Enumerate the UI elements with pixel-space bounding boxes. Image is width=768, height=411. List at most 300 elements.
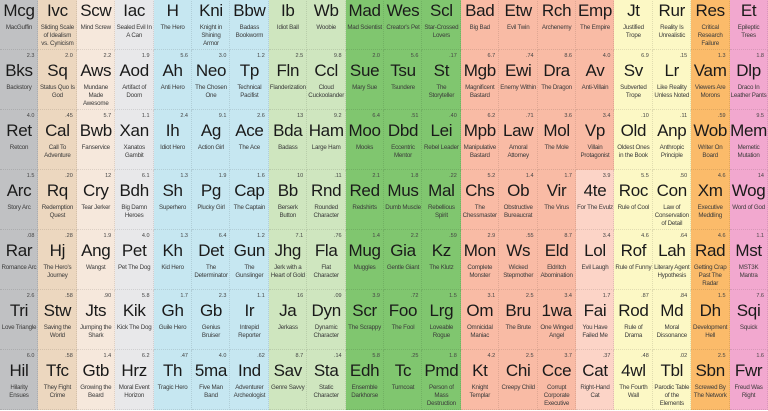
periodic table grid: Dh [700, 301, 721, 320]
periodic table grid: 2.1 [372, 173, 380, 179]
periodic table grid: Hrz [121, 361, 147, 380]
periodic table grid: Lah [658, 241, 686, 260]
periodic table grid: Complete Monster [467, 264, 492, 279]
periodic table grid: Edh [350, 361, 379, 380]
periodic table grid: Wog [732, 181, 765, 200]
periodic table grid: 1.7 [180, 293, 188, 299]
periodic table grid: Superhero [159, 204, 186, 211]
periodic table grid: Viewers Are Morons [695, 84, 726, 99]
periodic table grid: 4.6 [718, 233, 726, 239]
periodic table grid: Rch [542, 1, 571, 20]
periodic table grid: 6.9 [641, 53, 649, 59]
periodic table grid: Mgb [464, 61, 496, 80]
periodic table grid: The Virus [544, 204, 569, 211]
periodic table grid: Wes [387, 1, 419, 20]
periodic table grid: 1.1 [756, 233, 764, 239]
periodic table grid: 3.4 [564, 293, 572, 299]
periodic table grid: Rur [659, 1, 685, 20]
periodic table grid: Tear Jerker [81, 204, 110, 211]
periodic table grid: Sav [274, 361, 302, 380]
periodic table grid: Justified Trope [623, 24, 644, 39]
periodic table grid: Anthropic Principle [660, 144, 684, 159]
periodic table grid: Rounded Character [314, 204, 339, 219]
periodic table grid: .37 [603, 353, 610, 359]
periodic table grid: Gh [162, 301, 184, 320]
periodic table grid: .59 [718, 113, 726, 119]
periodic table grid: 4.6 [718, 173, 726, 179]
periodic table grid: .10 [641, 113, 649, 119]
periodic table grid: Call To Adventure [44, 144, 71, 159]
periodic table grid: Sliding Scale of Idealism vs. Cynicism [41, 24, 74, 47]
periodic table grid: One Winged Angel [540, 324, 573, 339]
periodic table grid: Evil Twin [507, 24, 529, 31]
periodic table grid: Cry [83, 181, 109, 200]
periodic table grid: Pet [122, 241, 146, 260]
periodic table grid: Muggles [354, 264, 376, 271]
periodic table grid: Kz [432, 241, 451, 260]
periodic table grid: Plucky Girl [197, 204, 225, 211]
periodic table grid: 1.3 [180, 233, 188, 239]
periodic table grid: The Determinator [194, 264, 228, 279]
periodic table grid: 13 [297, 113, 303, 119]
periodic table grid: 3.9 [603, 173, 610, 179]
periodic table grid: Saving the World [44, 324, 71, 339]
periodic table grid: Bad [465, 1, 494, 20]
periodic table grid: 1wa [541, 301, 572, 320]
periodic table grid: 3.6 [564, 113, 572, 119]
periodic table grid: Rule of Funny [615, 264, 651, 271]
periodic table grid: H [167, 1, 179, 20]
periodic table grid: Tsu [390, 61, 416, 80]
periodic table grid: 1.7 [564, 173, 572, 179]
periodic table grid: Idiot Hero [160, 144, 185, 151]
periodic table grid: Mol [543, 121, 570, 140]
periodic table grid: 2.4 [180, 113, 188, 119]
periodic table grid: Manipulative Bastard [464, 144, 496, 159]
periodic table grid: .64 [680, 233, 687, 239]
periodic table grid: Creator's Pet [386, 24, 420, 31]
periodic table grid: Sealed Evil In A Can [117, 24, 152, 39]
periodic table grid: The Empire [580, 24, 610, 31]
periodic table grid: 4.0 [603, 53, 610, 59]
row 7: 6.0 [27, 353, 34, 359]
periodic table grid: .15 [680, 53, 687, 59]
periodic table grid: Sta [314, 361, 338, 380]
row 2: 2.3 [27, 53, 34, 59]
periodic table grid: Anti Hero [161, 84, 185, 91]
periodic table grid: Five Man Band [199, 384, 223, 399]
periodic table grid: For The Evulz [577, 204, 613, 211]
periodic table grid: 1.7 [603, 293, 610, 299]
periodic table grid: The Chosen One [195, 84, 227, 99]
periodic table grid: Tsundere [391, 84, 415, 91]
periodic table grid: 6.2 [142, 353, 150, 359]
periodic table grid: Dumb Muscle [385, 204, 421, 211]
periodic table grid: Th [163, 361, 182, 380]
periodic table grid: Writer On Board [698, 144, 722, 159]
periodic table grid: Growing the Beard [80, 384, 111, 399]
periodic table grid: Xm [698, 181, 723, 200]
periodic table grid: 6.4 [372, 113, 380, 119]
periodic table grid: 2.6 [257, 113, 265, 119]
periodic table grid: 7.6 [756, 293, 764, 299]
periodic table grid: Kni [199, 1, 223, 20]
periodic table grid: Genius Bruiser [202, 324, 220, 339]
periodic table grid: 1.5 [449, 293, 457, 299]
periodic table grid: Tbl [660, 361, 683, 380]
periodic table grid: .87 [641, 293, 649, 299]
periodic table grid: 4wl [621, 361, 646, 380]
periodic table grid: Screwed By The Network [694, 384, 727, 399]
periodic table grid: Scl [430, 1, 453, 20]
periodic table grid: Ivc [47, 1, 68, 20]
periodic table grid: 3.1 [488, 293, 495, 299]
periodic table grid: .11 [334, 173, 342, 179]
periodic table grid: Sq [47, 61, 67, 80]
periodic table grid: Getting Crap Past The Radar [694, 264, 727, 287]
periodic table grid: 1.5 [718, 293, 726, 299]
periodic table grid: Woobie [316, 24, 336, 31]
periodic table grid: .90 [104, 293, 111, 299]
periodic table grid: 5.7 [104, 113, 111, 119]
periodic table grid: Av [586, 61, 604, 80]
periodic table grid: Mpb [464, 121, 496, 140]
periodic table grid: Rebel Leader [424, 144, 459, 151]
periodic table grid: Right-Hand Cat [580, 384, 610, 399]
periodic table grid: Freud Was Right [734, 384, 763, 399]
periodic table grid: Md [660, 301, 683, 320]
periodic table grid: You Have Failed Me [582, 324, 608, 339]
row 7 [0, 350, 38, 410]
periodic table grid: Badass Bookworm [236, 24, 263, 39]
periodic table grid: Reality Is Unrealistic [658, 24, 685, 39]
periodic table grid: 1.4 [104, 353, 111, 359]
periodic table grid: Wb [314, 1, 339, 20]
periodic table grid: Big Damn Heroes [121, 204, 147, 219]
periodic table grid: Magnificent Bastard [465, 84, 495, 99]
periodic table grid: Subverted Trope [620, 84, 647, 99]
periodic table grid: 1.2 [257, 233, 265, 239]
row 5 [0, 230, 38, 290]
periodic table grid: 5.6 [180, 53, 188, 59]
periodic table grid: Jt [627, 1, 640, 20]
periodic table grid: Mooks [356, 144, 373, 151]
periodic table grid: Creepy Child [502, 384, 535, 391]
periodic table grid: 2.9 [488, 233, 495, 239]
periodic table grid: Action Girl [198, 144, 224, 151]
periodic table grid: Bb [278, 181, 298, 200]
periodic table grid: Kid Hero [161, 264, 184, 271]
periodic table grid: Anp [657, 121, 686, 140]
periodic table grid: 1.6 [756, 353, 764, 359]
periodic table grid: Artifact of Doom [122, 84, 146, 99]
periodic table grid: Ah [162, 61, 183, 80]
periodic table grid: Ccl [314, 61, 338, 80]
row 4: Story Arc [7, 204, 31, 211]
periodic table grid: Jts [85, 301, 106, 320]
periodic table grid: Chs [465, 181, 494, 200]
periodic table grid: Mary Sue [352, 84, 377, 91]
periodic table grid: Flanderization [270, 84, 306, 91]
periodic table grid: Kt [472, 361, 488, 380]
periodic table grid: 1.1 [142, 113, 150, 119]
periodic table grid: Mug [348, 241, 381, 260]
periodic table grid: Et [741, 1, 756, 20]
periodic table grid: Genre Savvy [271, 384, 305, 391]
periodic table grid: Obstructive Bureaucrat [504, 204, 533, 219]
row 2: Backstory [6, 84, 32, 91]
periodic table grid: 5.8 [142, 293, 150, 299]
row 2: Bks [5, 61, 33, 80]
periodic table grid: Tc [395, 361, 411, 380]
periodic table grid: Cloud Cuckoolander [308, 84, 344, 99]
periodic table grid: The Fool [392, 324, 414, 331]
periodic table grid: Fla [315, 241, 338, 260]
periodic table grid: The Storyteller [429, 84, 454, 99]
periodic table grid: 4.6 [641, 233, 649, 239]
periodic table grid: Bdh [120, 181, 149, 200]
periodic table grid: Ham [309, 121, 344, 140]
periodic table grid: Ih [166, 121, 179, 140]
periodic table grid: Rnd [311, 181, 341, 200]
periodic table grid: Tp [240, 61, 259, 80]
row 3: Ret [6, 121, 32, 140]
periodic table grid: Etw [504, 1, 532, 20]
periodic table grid: Law [503, 121, 533, 140]
periodic table grid: Bda [273, 121, 302, 140]
periodic table grid: Rof [621, 241, 646, 260]
periodic table grid: 5.2 [488, 173, 495, 179]
row 1 [0, 0, 38, 50]
periodic table grid: Badass [278, 144, 298, 151]
periodic table grid: Squick [740, 324, 757, 331]
periodic table grid: Moo [348, 121, 381, 140]
periodic table grid: Old [621, 121, 646, 140]
periodic table grid: Redshirts [352, 204, 377, 211]
periodic table grid: Bru [505, 301, 531, 320]
periodic table grid: Development Hell [693, 324, 727, 339]
row 5: Romance Arc [2, 264, 36, 271]
periodic table grid: 3.4 [603, 113, 610, 119]
periodic table grid: Mem [730, 121, 767, 140]
periodic table grid: 1.8 [756, 53, 764, 59]
periodic table grid: 1.4 [526, 173, 534, 179]
periodic table grid: Mad [348, 1, 381, 20]
periodic table grid: Archenemy [542, 24, 571, 31]
periodic table grid: Draco In Leather Pants [731, 84, 767, 99]
periodic table grid: Ensemble Darkhorse [351, 384, 378, 399]
periodic table grid: Gun [234, 241, 265, 260]
periodic table grid: Kh [162, 241, 183, 260]
periodic table grid: 1.2 [257, 53, 265, 59]
periodic table grid: .62 [257, 353, 265, 359]
periodic table grid: 6.2 [488, 113, 495, 119]
periodic table grid: Scr [352, 301, 377, 320]
periodic table grid: Person of Mass Destruction [427, 384, 456, 407]
row 6: 2.6 [27, 293, 34, 299]
periodic table grid: Oldest Ones in the Book [617, 144, 649, 159]
periodic table grid: Pet The Dog [118, 264, 150, 271]
periodic table grid: 7.1 [296, 233, 303, 239]
periodic table grid: Iac [123, 1, 145, 20]
periodic table grid: 5ma [195, 361, 227, 380]
periodic table grid: .47 [180, 353, 188, 359]
periodic table grid: Mus [387, 181, 419, 200]
periodic table grid: Technical Pacifist [237, 84, 261, 99]
periodic table grid: .17 [449, 53, 457, 59]
periodic table grid: Rad [695, 241, 725, 260]
periodic table grid: Vam [694, 61, 727, 80]
periodic table grid: Ind [238, 361, 261, 380]
row 6 [0, 290, 38, 350]
periodic table grid: Fai [584, 301, 606, 320]
periodic table grid: Word of God [732, 204, 765, 211]
periodic table grid: Cat [582, 361, 608, 380]
periodic table grid: .58 [65, 293, 73, 299]
periodic table grid: Scw [80, 1, 111, 20]
periodic table grid: Ir [244, 301, 254, 320]
periodic table grid: Foo [389, 301, 417, 320]
periodic table grid: Ob [507, 181, 529, 200]
periodic table grid: The Fourth Wall [619, 384, 648, 399]
periodic table grid: 1.9 [104, 233, 111, 239]
periodic table grid: Jerkass [278, 324, 298, 331]
periodic table grid: Turncoat [392, 384, 414, 391]
periodic table grid: Dbd [388, 121, 418, 140]
periodic table grid: Gb [200, 301, 222, 320]
row 3: 4.0 [27, 113, 34, 119]
periodic table grid: Mind Screw [81, 24, 111, 31]
periodic table grid: Tfc [46, 361, 69, 380]
periodic table grid: 4.0 [219, 353, 226, 359]
periodic table grid: 14 [758, 173, 764, 179]
periodic table grid: Star-Crossed Lovers [424, 24, 458, 39]
periodic table grid: 2.3 [219, 293, 226, 299]
periodic table grid: Omnicidal Maniac [467, 324, 493, 339]
row 5: .08 [27, 233, 34, 239]
periodic table grid: Dynamic Character [314, 324, 339, 339]
periodic table grid: .72 [411, 293, 418, 299]
periodic table grid: Wangst [86, 264, 106, 271]
periodic table grid: Intrepid Reporter [238, 324, 261, 339]
periodic table grid: .71 [526, 113, 534, 119]
periodic table grid: Hj [50, 241, 65, 260]
periodic table grid: The Gunslinger [235, 264, 263, 279]
periodic table grid: The Hero [160, 24, 185, 31]
periodic table grid: Eccentric Mentor [391, 144, 415, 159]
periodic table grid: 1.9 [219, 173, 226, 179]
periodic table grid: Sqi [737, 301, 760, 320]
periodic table grid: Roc [619, 181, 648, 200]
periodic table grid: .09 [334, 293, 342, 299]
periodic table grid: .11 [680, 113, 687, 119]
periodic table grid: Bbw [233, 1, 265, 20]
row 6: Tri [10, 301, 28, 320]
periodic table grid: Gia [390, 241, 416, 260]
periodic table grid: Adventurer Archeologist [234, 384, 265, 399]
periodic table grid: 1.8 [449, 353, 457, 359]
row 3 [0, 110, 38, 170]
periodic table grid: Pg [201, 181, 221, 200]
row 6: Love Triangle [2, 324, 36, 331]
periodic table grid: 1.3 [718, 53, 726, 59]
periodic table grid: Ang [81, 241, 110, 260]
periodic table grid: Lr [665, 61, 679, 80]
periodic table grid: .50 [680, 173, 687, 179]
periodic table grid: 5.5 [641, 173, 649, 179]
periodic table grid: Ag [201, 121, 221, 140]
periodic table grid: Mst [735, 241, 762, 260]
row 7: Hilarity Ensues [9, 384, 29, 399]
periodic table grid: The Captain [234, 204, 265, 211]
periodic table grid: 4.0 [142, 233, 150, 239]
periodic table grid: Eldritch Abomination [540, 264, 573, 279]
periodic table grid: 6.4 [219, 233, 226, 239]
periodic table grid: Vir [547, 181, 566, 200]
periodic table grid: The Chessmaster [463, 204, 497, 219]
periodic table grid: 3.0 [219, 53, 226, 59]
periodic table grid: Cal [45, 121, 70, 140]
periodic table grid: Berserk Button [278, 204, 298, 219]
periodic table grid: 1.9 [142, 53, 150, 59]
row 2 [0, 50, 38, 110]
periodic table grid: Static Character [314, 384, 339, 399]
periodic table grid: Like Reality Unless Noted [654, 84, 689, 99]
periodic table grid: 1.1 [257, 293, 265, 299]
periodic table grid: Ja [279, 301, 296, 320]
periodic table grid: Xan [120, 121, 149, 140]
periodic table grid: The Klutz [429, 264, 454, 271]
periodic table grid: 8.6 [564, 53, 572, 59]
periodic table grid: Eld [545, 241, 568, 260]
periodic table grid: 2.5 [296, 53, 303, 59]
periodic table grid: Rod [618, 301, 649, 320]
periodic table grid: 2.0 [65, 53, 73, 59]
periodic table grid: Mal [428, 181, 455, 200]
periodic table grid: Enemy Within [500, 84, 536, 91]
periodic table grid: 5.6 [411, 53, 418, 59]
periodic table grid: 1.4 [372, 233, 380, 239]
periodic table grid: Wicked Stepmother [503, 264, 533, 279]
periodic table grid: Tragic Hero [158, 384, 188, 391]
row 4: Arc [7, 181, 31, 200]
periodic table grid: MST3K Mantra [739, 264, 758, 279]
periodic table grid: 2.0 [372, 53, 380, 59]
periodic table grid: Sbn [696, 361, 725, 380]
periodic table grid: .74 [526, 53, 534, 59]
periodic table grid: Red [349, 181, 380, 200]
periodic table grid: .02 [680, 353, 687, 359]
periodic table grid: 3.4 [603, 233, 610, 239]
periodic table grid: .40 [449, 113, 457, 119]
periodic table grid: .55 [526, 233, 534, 239]
periodic table grid: .84 [680, 293, 687, 299]
periodic table grid: The Brute [506, 324, 531, 331]
row 4: 1.5 [27, 173, 34, 179]
periodic table grid: Kik [123, 301, 146, 320]
periodic table grid: Lei [430, 121, 452, 140]
periodic table grid: Vp [585, 121, 605, 140]
periodic table grid: Epileptic Trees [738, 24, 759, 39]
periodic table grid: Lol [584, 241, 606, 260]
periodic table grid: .14 [334, 353, 342, 359]
periodic table grid: Gentle Giant [387, 264, 419, 271]
periodic table grid: Fwr [735, 361, 762, 380]
periodic table grid: Law of Conservation of Detail [655, 204, 689, 227]
periodic table grid: 2.5 [526, 353, 534, 359]
periodic table grid: Critical Research Failure [698, 24, 723, 47]
periodic table grid: Jhg [275, 241, 301, 260]
